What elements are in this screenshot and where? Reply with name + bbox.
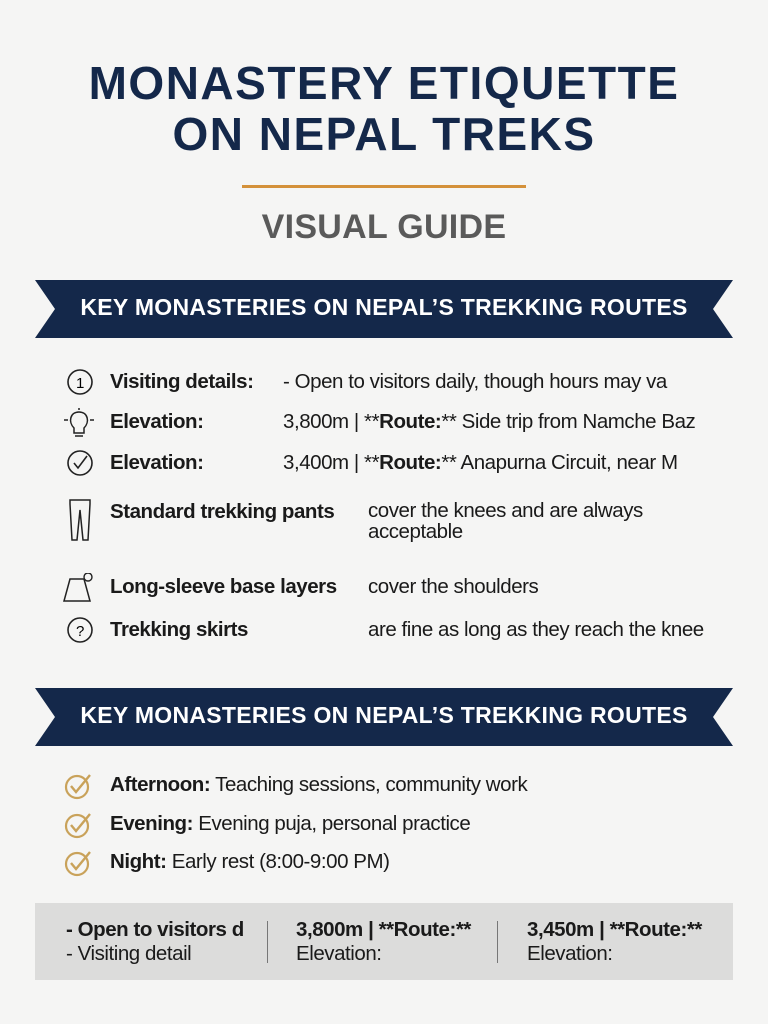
column 3: Elevation: (527, 942, 613, 965)
column 2 (296, 918, 472, 965)
item: night (64, 850, 390, 876)
row: visiting details: Visiting details: (110, 370, 253, 393)
banner 1 (35, 280, 733, 338)
row: pants: Standard trekking pants (110, 500, 334, 523)
row: base layers: cover the shoulders (368, 575, 538, 598)
subtitle: VISUAL GUIDE (262, 208, 506, 246)
summary box (35, 903, 733, 980)
item: afternoon (64, 773, 528, 800)
column 1: - Visiting detail (66, 942, 191, 965)
banner 1: KEY MONASTERIES ON NEPAL’S TREKKING ROUTES (80, 294, 688, 320)
panel: daily schedule (64, 773, 528, 876)
row: skirts: are fine as long as they reach the knee (368, 618, 704, 641)
panel: daily schedule: Afternoon: Teaching sessions, community work (110, 773, 527, 796)
panel: daily schedule: Night: Early rest (8:00-9:00 PM) (110, 850, 390, 873)
row: skirts (67, 617, 704, 643)
row: elevation 2: 3,400m | **Route:** Anapurna Circuit, near M (283, 451, 678, 474)
row: skirts: ? (76, 623, 84, 640)
row: base layers (63, 573, 538, 602)
row: elevation 2 (67, 450, 678, 476)
title (89, 57, 679, 160)
row: base layers: Long-sleeve base layers (110, 575, 337, 598)
column 1 (66, 918, 244, 965)
column 3 (527, 918, 702, 965)
row: elevation 1: 3,800m | **Route:** Side trip from Namche Baz (283, 410, 695, 433)
column 2: Elevation: (296, 942, 382, 965)
column 2: 3,800m | **Route:** (296, 918, 471, 941)
panel: details list (63, 369, 704, 643)
column 3: 3,450m | **Route:** (527, 918, 702, 941)
panel: daily schedule: Evening: Evening puja, personal practice (110, 812, 470, 835)
row: skirts: Trekking skirts (110, 618, 248, 641)
row: pants: cover the knees and are always (368, 499, 643, 522)
divider accent (242, 185, 526, 188)
row: elevation 1: Elevation: (110, 410, 203, 433)
row: visiting details: 1 (76, 375, 84, 392)
title: MONASTERY ETIQUETTE (89, 57, 679, 109)
row: elevation 2: Elevation: (110, 451, 203, 474)
row: pants: acceptable (368, 520, 463, 543)
row: visiting details: - Open to visitors daily, though hours may va (283, 370, 667, 393)
row: pants (69, 499, 643, 543)
row: visiting details (67, 369, 668, 395)
row: elevation 1 (64, 408, 695, 437)
title: ON NEPAL TREKS (172, 108, 596, 160)
item: evening (64, 812, 470, 838)
column 1: - Open to visitors d (66, 918, 244, 941)
banner 2: KEY MONASTERIES ON NEPAL’S TREKKING ROUTES (80, 702, 688, 728)
banner 2 (35, 688, 733, 746)
